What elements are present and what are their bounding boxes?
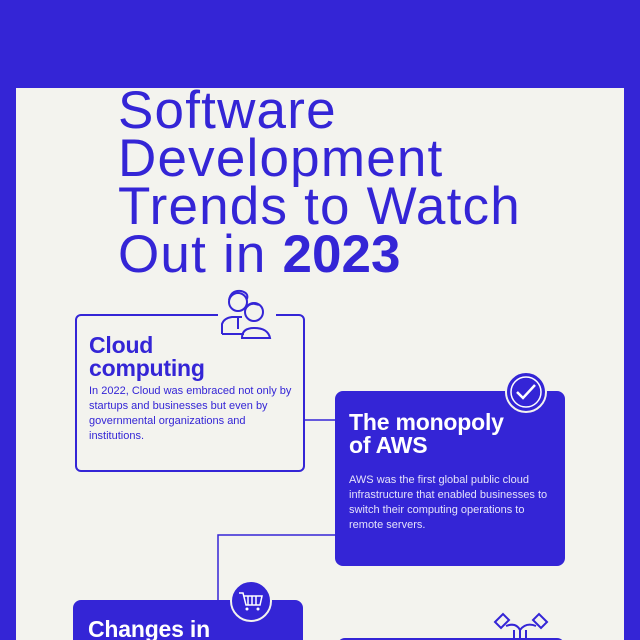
heading: monopoly of AWS: of AWS (349, 432, 427, 458)
title: Out in 2023 (118, 225, 400, 284)
icon: check (505, 373, 547, 413)
heading: cloud computing (89, 332, 205, 381)
heading: cloud computing: computing (89, 355, 205, 381)
heading: monopoly of AWS: The monopoly (349, 409, 504, 435)
heading: cloud computing: Cloud (89, 332, 153, 358)
text: AWS: AWS was the first global public cloud infrastructure that enabled businesses to switch their computing operations to remote servers. (349, 474, 547, 531)
heading: monopoly of AWS (349, 409, 504, 458)
title: Development (118, 129, 443, 188)
title: Software (118, 81, 337, 140)
panel: changes in (73, 600, 303, 640)
title (118, 81, 521, 284)
icon: cart (230, 582, 272, 622)
title: Trends to Watch (118, 177, 521, 236)
panel: monopoly of AWS (335, 391, 565, 566)
icon: people (218, 290, 276, 339)
panel: bottom right (337, 638, 565, 640)
panel: cloud computing (75, 314, 305, 472)
text: cloud computing: In 2022, Cloud was embraced not only by startups and businesses but even by governmental organizations and institutions. (89, 385, 291, 442)
icon: handshake (494, 612, 548, 638)
